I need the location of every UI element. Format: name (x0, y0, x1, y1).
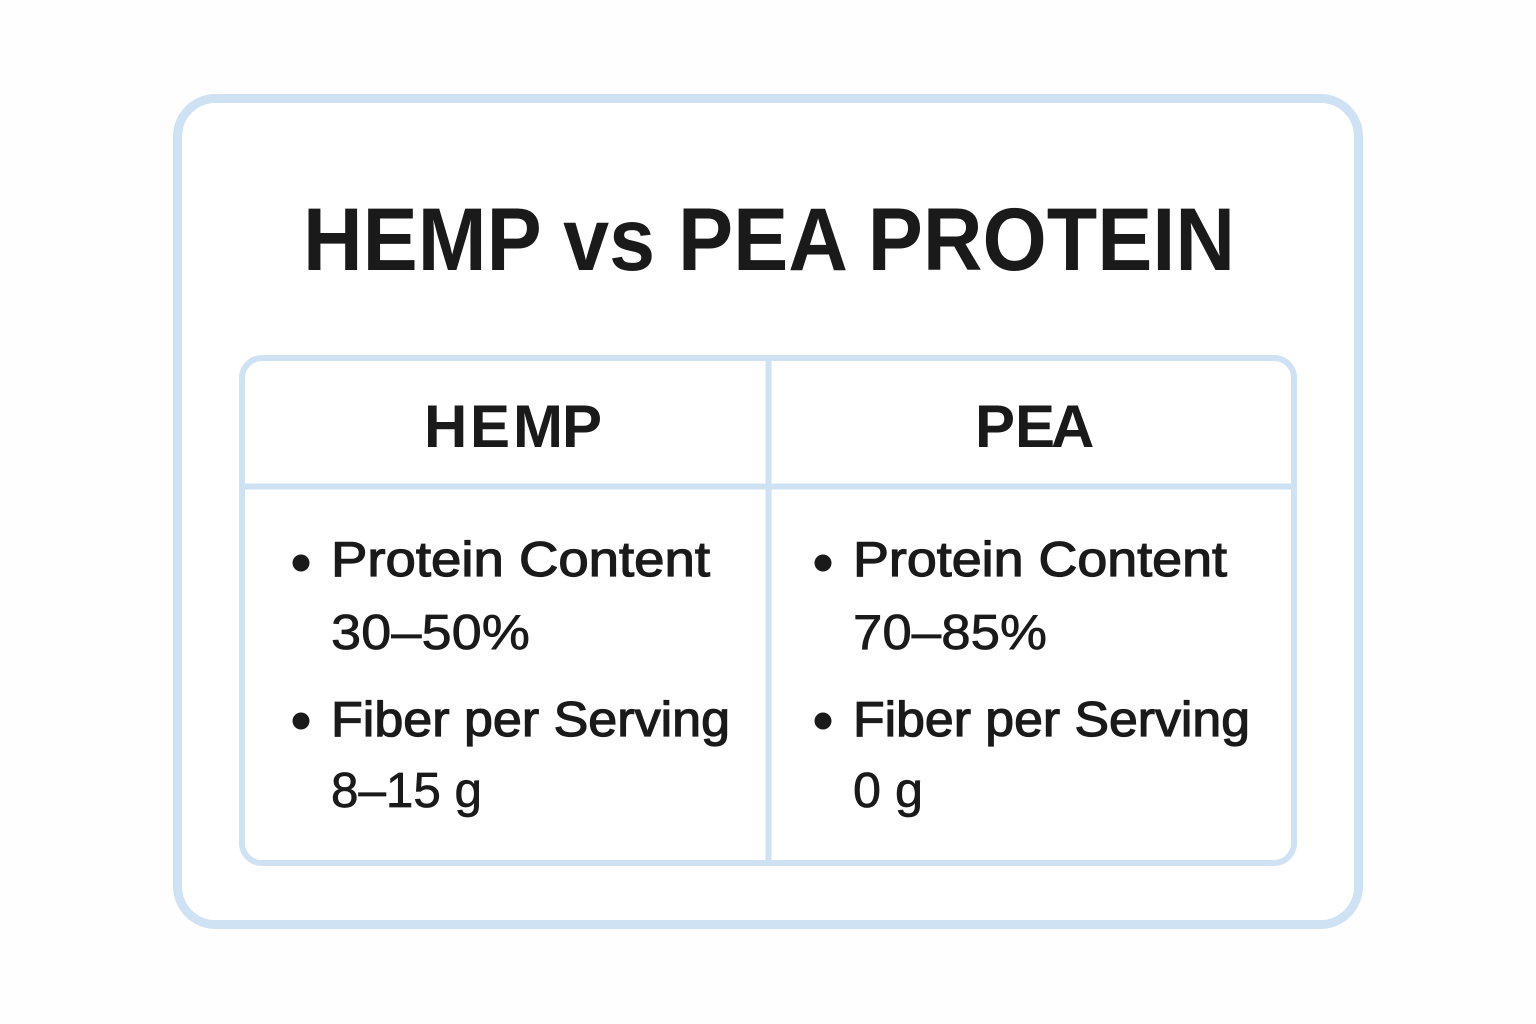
hemp value: protein content: 30–50% (331, 606, 530, 660)
hemp bullet: protein content (292, 554, 310, 572)
hemp column list (292, 533, 730, 818)
heading: hemp column: HEMP (424, 393, 602, 460)
pea bullet: protein content (814, 554, 832, 572)
hemp label: fiber per serving: Fiber per Serving (331, 693, 730, 747)
hemp value: fiber per serving: 8–15 g (331, 764, 482, 818)
header divider (242, 484, 1294, 490)
heading: pea column: PEA (975, 393, 1094, 460)
hemp label: protein content: Protein Content (331, 533, 710, 587)
panel: outer card (178, 98, 1358, 924)
pea bullet: fiber per serving (814, 712, 832, 730)
pea label: protein content: Protein Content (853, 533, 1227, 587)
title: HEMP vs PEA PROTEIN (303, 189, 1235, 289)
comparison table (242, 358, 1294, 863)
pea value: fiber per serving: 0 g (853, 764, 923, 818)
pea label: fiber per serving: Fiber per Serving (853, 693, 1250, 747)
hemp bullet: fiber per serving (292, 712, 310, 730)
pea column list (814, 533, 1250, 818)
pea value: protein content: 70–85% (853, 606, 1047, 660)
column divider (766, 358, 772, 863)
table frame (242, 358, 1294, 863)
